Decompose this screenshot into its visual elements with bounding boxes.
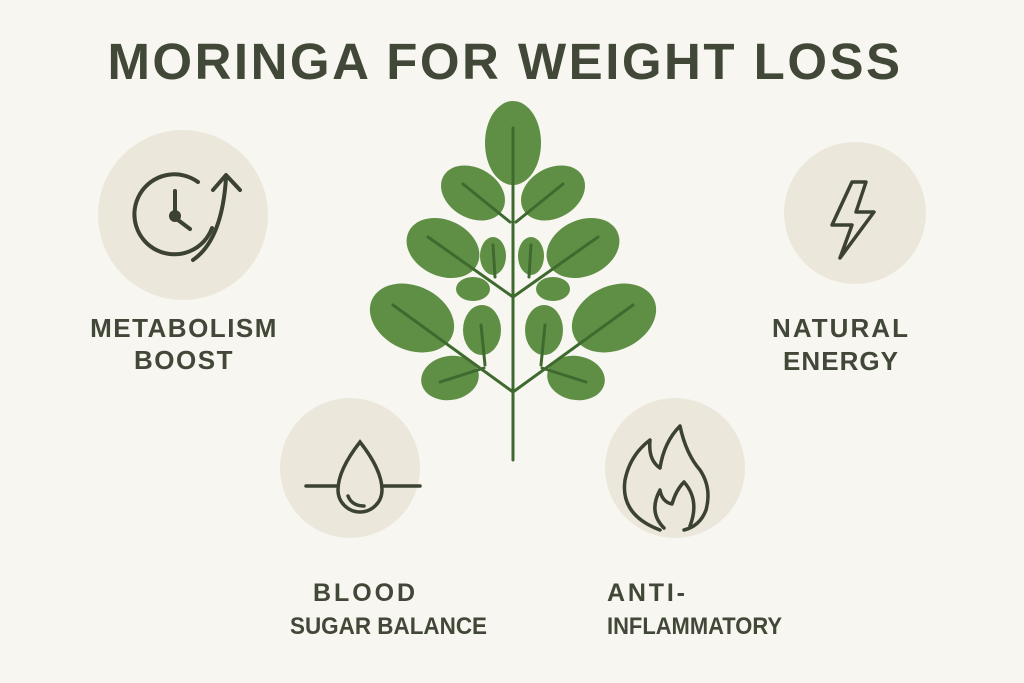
panel: anti-inflammatory: INFLAMMATORY	[607, 613, 782, 640]
icon: water drop	[306, 442, 420, 512]
label: blood sugar balance: BLOOD	[313, 579, 415, 607]
panel: blood sugar balance	[280, 398, 487, 640]
icon: lightning bolt	[832, 182, 874, 258]
panel: natural energy	[772, 142, 926, 376]
label: natural energy: NATURAL	[772, 313, 908, 343]
panel: metabolism boost: BOOST	[134, 345, 234, 375]
icon: flame	[624, 426, 708, 530]
label: anti-inflammatory: ANTI-	[607, 579, 685, 607]
panel: blood sugar balance: SUGAR BALANCE	[290, 613, 487, 640]
panel: anti-inflammatory	[605, 398, 782, 640]
icon: clock with arrow	[134, 174, 240, 260]
illustration: moringa branch	[359, 101, 667, 460]
label: metabolism boost: METABOLISM	[90, 313, 278, 343]
panel: natural energy: ENERGY	[783, 346, 898, 376]
panel: metabolism boost	[90, 130, 278, 375]
title: MORINGA FOR WEIGHT LOSS	[107, 33, 903, 90]
